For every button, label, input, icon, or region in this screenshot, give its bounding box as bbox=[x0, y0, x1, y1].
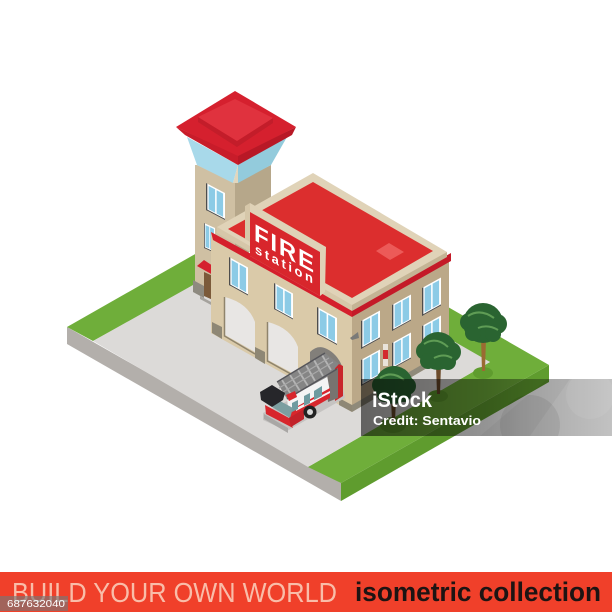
front windows bbox=[229, 257, 337, 345]
tower roof bbox=[176, 91, 296, 165]
truck rear bbox=[326, 362, 343, 402]
tree right bbox=[460, 303, 507, 379]
truck shadow bbox=[263, 375, 345, 431]
ground base bbox=[67, 253, 549, 501]
watermark credit text: Credit: Sentavio bbox=[373, 413, 481, 428]
truck body side bbox=[287, 375, 330, 423]
garage door 2 bbox=[268, 322, 298, 378]
eave bbox=[211, 232, 451, 317]
sign panel bbox=[245, 203, 326, 296]
banner collection label: isometric collection bbox=[355, 577, 601, 607]
tower windows bbox=[204, 183, 225, 253]
tower entrance door and awning bbox=[193, 260, 213, 306]
ladder bbox=[277, 353, 339, 399]
watermark logo text: iStock bbox=[372, 389, 432, 412]
fire extinguisher bbox=[383, 344, 388, 366]
main building walls bbox=[211, 232, 449, 412]
garage door 1 bbox=[224, 297, 255, 354]
image id bbox=[0, 596, 68, 611]
cab bbox=[264, 391, 304, 433]
fire truck bbox=[260, 353, 345, 433]
sign text station: station bbox=[255, 241, 313, 287]
watermark panel bbox=[361, 379, 612, 436]
parapet bbox=[217, 173, 447, 310]
roof hatch bbox=[376, 243, 404, 260]
bottom banner bbox=[0, 572, 612, 612]
banner tagline: BUILD YOUR OWN WORLD bbox=[12, 577, 337, 608]
parapet outer faces bbox=[217, 227, 352, 311]
sign text FIRE: FIRE bbox=[254, 219, 314, 279]
tree front bbox=[372, 366, 416, 433]
tower glass lookout bbox=[187, 137, 287, 183]
wall bases bbox=[212, 322, 449, 412]
roof bbox=[211, 173, 451, 317]
equipment box bbox=[260, 385, 285, 407]
wall lamp bbox=[350, 332, 359, 340]
garage opening bbox=[310, 347, 342, 400]
truck wheel bbox=[304, 406, 316, 418]
tree middle bbox=[416, 332, 461, 402]
roof surface bbox=[228, 182, 433, 298]
tower bbox=[176, 91, 296, 306]
side windows bbox=[361, 278, 441, 386]
image id: 687632040 bbox=[7, 598, 65, 610]
